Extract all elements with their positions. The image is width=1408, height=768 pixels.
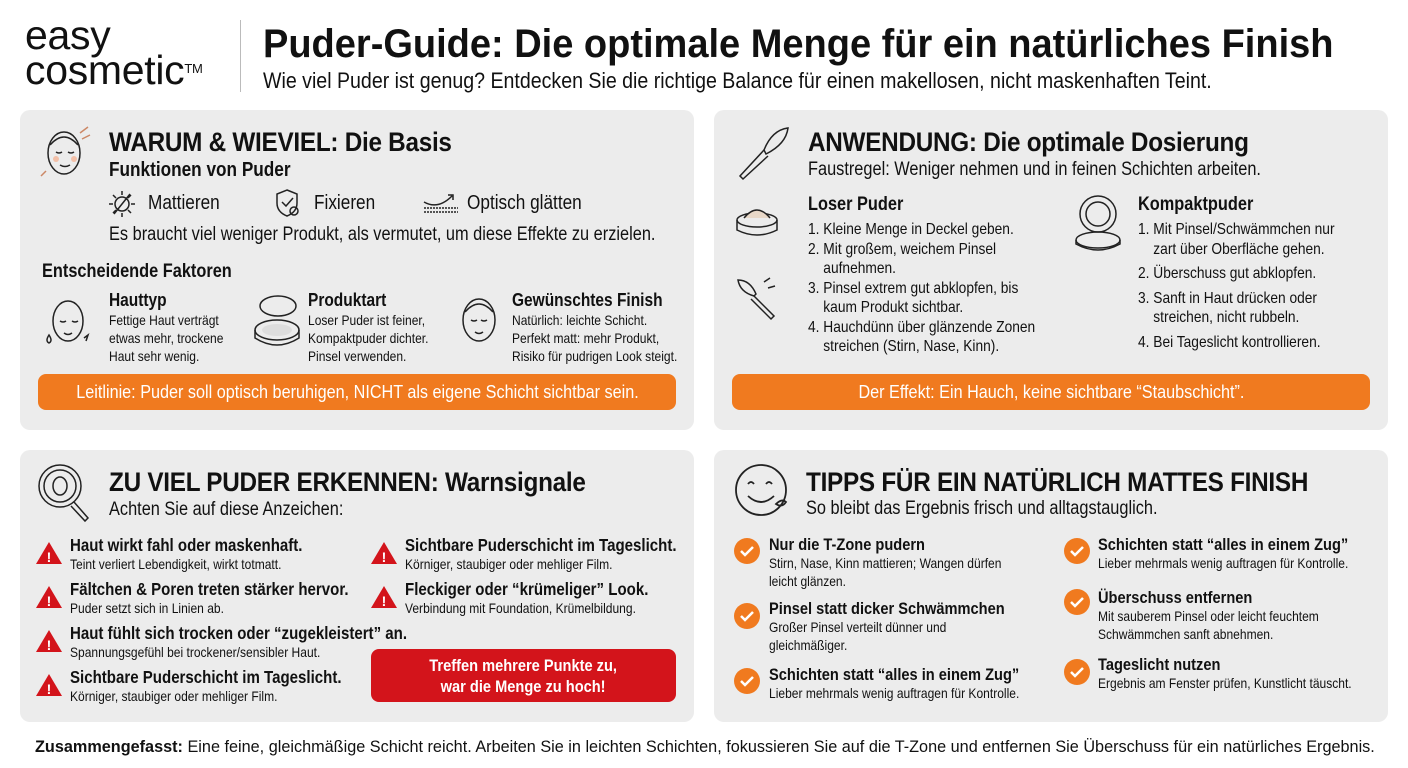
- tips list: gleichmäßiger.: [769, 637, 847, 653]
- heading: WARUM & WIEVIEL: Die Basis: [109, 127, 452, 157]
- warning list: Puder setzt sich in Linien ab.: [70, 600, 224, 616]
- factor: produktart: Loser Puder ist feiner,: [308, 312, 425, 328]
- functions row: [109, 189, 582, 217]
- warning list: Fleckiger oder “krümeliger” Look.: [405, 579, 648, 599]
- tips list: Lieber mehrmals wenig auftragen für Kontrolle.: [1098, 555, 1348, 571]
- factor: finish: Natürlich: leichte Schicht.: [512, 312, 647, 328]
- logo: easy: [25, 12, 110, 58]
- factor: hauttyp: Hauttyp: [109, 290, 167, 310]
- callout: warning box: Treffen mehrere Punkte zu,: [430, 656, 617, 674]
- panel: anwendung: Faustregel: Weniger nehmen und in feinen Schichten arbeiten.: [808, 159, 1261, 180]
- tips list: [734, 535, 1352, 701]
- factor: produktart: [254, 290, 428, 364]
- tips list: Schwämmchen sanft abnehmen.: [1098, 626, 1273, 642]
- column: loser puder: 1. Kleine Menge in Deckel geben.: [808, 221, 1014, 238]
- column: loser puder: 4. Hauchdünn über glänzende Zonen: [808, 318, 1035, 336]
- warning list: !: [47, 549, 51, 565]
- factor: hauttyp: etwas mehr, trockene: [109, 330, 223, 346]
- column: kompaktpuder: 4. Bei Tageslicht kontrollieren.: [1138, 334, 1321, 350]
- panel: warnsignale: [20, 450, 694, 722]
- tips list: Schichten statt “alles in einem Zug”: [1098, 535, 1348, 554]
- column: kompaktpuder: streichen, nicht rubbeln.: [1153, 309, 1299, 326]
- warning list: !: [382, 593, 386, 609]
- factor: hauttyp: Haut sehr wenig.: [109, 348, 199, 364]
- column: loser puder: streichen (Stirn, Nase, Kinn).: [823, 338, 999, 355]
- icon: magnifier: [38, 464, 89, 522]
- column: kompaktpuder: zart über Oberfläche gehen.: [1153, 240, 1325, 258]
- logo: cosmeticTM: [25, 47, 203, 93]
- factor: hauttyp: [46, 290, 223, 364]
- factor: produktart: Produktart: [308, 290, 386, 310]
- column: kompaktpuder: 2. Überschuss gut abklopfen.: [1138, 265, 1316, 282]
- warning list: Verbindung mit Foundation, Krümelbildung.: [405, 600, 636, 616]
- callout: warning box: war die Menge zu hoch!: [441, 676, 606, 696]
- column: kompaktpuder: [1075, 194, 1335, 350]
- tips list: Ergebnis am Fenster prüfen, Kunstlicht täuscht.: [1098, 675, 1352, 691]
- factor: finish: Risiko für pudrigen Look steigt.: [512, 348, 677, 364]
- functions row: Fixieren: [314, 192, 375, 214]
- panel: warnsignale: Achten Sie auf diese Anzeichen:: [109, 499, 343, 520]
- warning list: !: [47, 637, 51, 653]
- tips list: Tageslicht nutzen: [1098, 655, 1220, 674]
- column: loser puder: 2. Mit großem, weichem Pinsel: [808, 240, 996, 258]
- callout: effekt: [732, 374, 1370, 410]
- factor: hauttyp: Fettige Haut verträgt: [109, 312, 219, 328]
- panel: basis: [20, 110, 694, 430]
- panel: basis: Funktionen von Puder: [109, 159, 291, 181]
- tips list: Pinsel statt dicker Schwämmchen: [769, 599, 1005, 618]
- tips list: Überschuss entfernen: [1098, 588, 1252, 607]
- panel: tipps: So bleibt das Ergebnis frisch und alltagstauglich.: [806, 498, 1158, 519]
- callout: effekt: Der Effekt: Ein Hauch, keine sichtbare “Staubschicht”.: [858, 382, 1244, 402]
- icon: brush: [739, 127, 789, 180]
- warning list: [36, 535, 677, 704]
- callout: leitlinie: [38, 374, 676, 410]
- heading: faktoren: Entscheidende Faktoren: [42, 261, 232, 282]
- tips list: leicht glänzen.: [769, 573, 846, 589]
- panel: basis: Es braucht viel weniger Produkt, als vermutet, um diese Effekte zu erzielen.: [109, 224, 655, 245]
- tips list: Mit sauberem Pinsel oder leicht feuchtem: [1098, 608, 1319, 624]
- column: kompaktpuder: 1. Mit Pinsel/Schwämmchen nur: [1138, 221, 1335, 238]
- column: kompaktpuder: 3. Sanft in Haut drücken oder: [1138, 290, 1317, 306]
- tips list: Stirn, Nase, Kinn mattieren; Wangen dürfen: [769, 555, 1001, 571]
- column: kompaktpuder: Kompaktpuder: [1138, 194, 1253, 215]
- heading: ZU VIEL PUDER ERKENNEN: Warnsignale: [109, 467, 586, 497]
- tips list: Lieber mehrmals wenig auftragen für Kontrolle.: [769, 685, 1019, 701]
- factor: produktart: Pinsel verwenden.: [308, 348, 406, 364]
- warning list: Körniger, staubiger oder mehliger Film.: [70, 688, 277, 704]
- column: loser puder: Loser Puder: [808, 194, 903, 215]
- icon: smile: [735, 464, 788, 516]
- icon: shield: [276, 189, 299, 217]
- warning list: Haut fühlt sich trocken oder “zugekleistert” an.: [70, 623, 407, 643]
- tips list: Nur die T-Zone pudern: [769, 535, 925, 554]
- warning list: !: [47, 681, 51, 697]
- heading: ANWENDUNG: Die optimale Dosierung: [808, 127, 1249, 157]
- warning list: !: [382, 549, 386, 565]
- factor: finish: Perfekt matt: mehr Produkt,: [512, 330, 659, 346]
- column: loser puder: aufnehmen.: [823, 260, 896, 277]
- factor: finish: [462, 290, 677, 364]
- factor: produktart: Kompaktpuder dichter.: [308, 330, 428, 346]
- logo: [25, 12, 203, 93]
- callout: warning box: [371, 649, 676, 702]
- warning list: Haut wirkt fahl oder maskenhaft.: [70, 535, 302, 555]
- warning list: Teint verliert Lebendigkeit, wirkt totmatt.: [70, 556, 281, 572]
- warning list: Fältchen & Poren treten stärker hervor.: [70, 579, 349, 599]
- warning list: Spannungsgefühl bei trockener/sensibler Haut.: [70, 644, 320, 660]
- heading: TIPPS FÜR EIN NATÜRLICH MATTES FINISH: [806, 467, 1308, 497]
- icon: sun: [109, 191, 135, 217]
- warning list: Sichtbare Puderschicht im Tageslicht.: [405, 535, 677, 555]
- icon: face: [40, 126, 90, 176]
- factor: finish: Gewünschtes Finish: [512, 290, 663, 310]
- column: loser puder: kaum Produkt sichtbar.: [823, 299, 963, 316]
- column: loser puder: [736, 194, 1035, 355]
- tips list: Großer Pinsel verteilt dünner und: [769, 619, 946, 635]
- tips list: Schichten statt “alles in einem Zug”: [769, 665, 1019, 684]
- panel: anwendung: [714, 110, 1388, 430]
- warning list: Körniger, staubiger oder mehliger Film.: [405, 556, 612, 572]
- functions row: Optisch glätten: [467, 192, 582, 214]
- subtitle: Wie viel Puder ist genug? Entdecken Sie die richtige Balance für einen makellosen, nicht maskenhaften Teint.: [263, 68, 1212, 93]
- column: loser puder: 3. Pinsel extrem gut abklopfen, bis: [808, 280, 1018, 296]
- functions row: Mattieren: [148, 192, 220, 214]
- warning list: !: [47, 593, 51, 609]
- icon: smooth: [424, 194, 458, 213]
- callout: leitlinie: Leitlinie: Puder soll optisch beruhigen, NICHT als eigene Schicht sichtbar sein.: [76, 382, 638, 402]
- warning list: Sichtbare Puderschicht im Tageslicht.: [70, 667, 342, 687]
- title: Puder-Guide: Die optimale Menge für ein natürliches Finish: [263, 22, 1333, 66]
- panel: tipps: [714, 450, 1388, 722]
- footer summary: Zusammengefasst: Eine feine, gleichmäßige Schicht reicht. Arbeiten Sie in leichten Schichten, fokussieren Sie auf die T-Zone und entfernen Sie Überschuss für ein natürliches Ergebnis.: [35, 737, 1375, 756]
